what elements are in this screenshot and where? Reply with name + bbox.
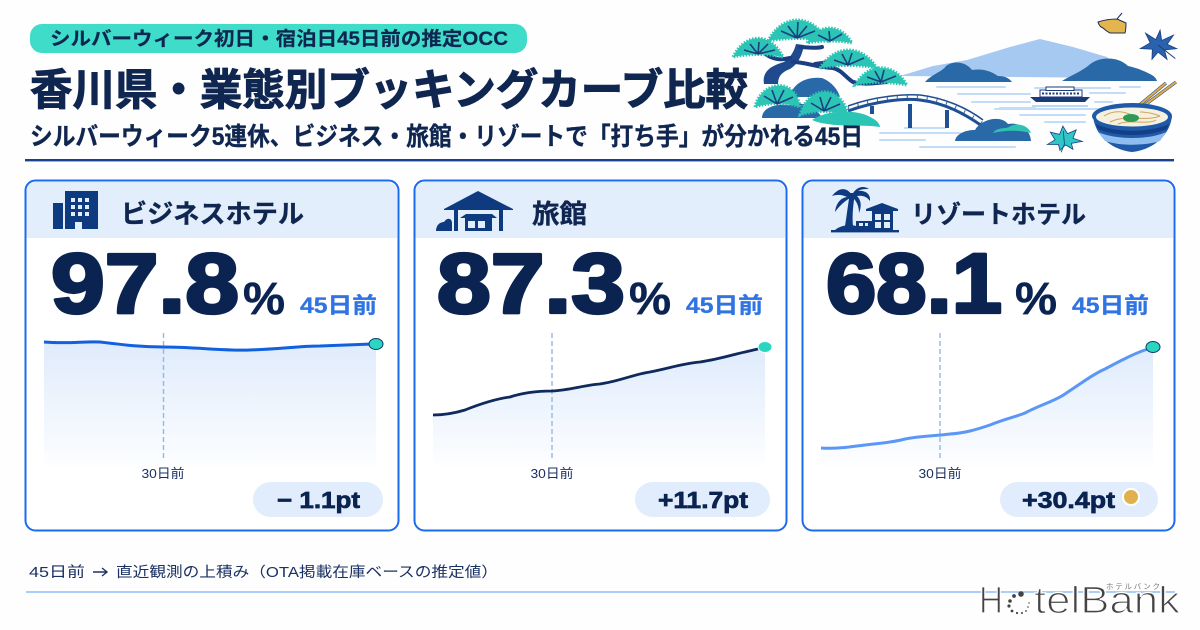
header tag pill <box>30 24 527 53</box>
panel: resort hotel <box>802 180 1174 530</box>
change badge <box>635 482 770 517</box>
udon bowl <box>1092 82 1176 152</box>
card header band <box>416 182 785 238</box>
dark bushes <box>790 78 840 97</box>
left island <box>925 63 1012 82</box>
icon: ryokan building <box>436 191 513 231</box>
footnote: 直近観測の上積み（OTA掲載在庫ベースの推定値） <box>116 564 498 581</box>
teal bush on small island <box>993 125 1031 133</box>
card frame <box>26 180 398 530</box>
trunk and branches <box>764 44 804 84</box>
occupancy value: 87.3 <box>437 236 625 330</box>
card heading: ビジネスホテル <box>121 199 304 229</box>
pine tree <box>733 20 907 127</box>
logo: HotelBank: H <box>979 580 1003 622</box>
logo: HotelBank: telBank <box>1034 580 1181 622</box>
change badge: +30.4pt <box>1022 487 1115 513</box>
ferry <box>1030 87 1090 106</box>
water ripples <box>880 87 1140 147</box>
card heading: 旅館 <box>532 199 587 229</box>
subtitle: シルバーウィーク5連休、ビジネス・旅館・リゾートで「打ち手」が分かれる45日 <box>30 122 863 151</box>
header tag pill: シルバーウィーク初日・宿泊日45日前の推定OCC <box>50 28 508 50</box>
percent sign: % <box>629 273 671 324</box>
line chart: 30日前 <box>142 466 184 481</box>
illustration: Kagawa scenery <box>733 13 1179 153</box>
arched bridge <box>848 95 983 128</box>
panel: business hotel <box>26 180 398 530</box>
occupancy value: 68.1 <box>826 236 1002 330</box>
header rule <box>25 159 1174 161</box>
change badge: − 1.1pt <box>277 487 360 513</box>
line chart <box>433 333 772 481</box>
small island <box>955 119 1031 141</box>
days label: 45日前 <box>686 293 763 318</box>
title: 香川県・業態別ブッキングカーブ比較 <box>30 67 748 115</box>
card header band <box>26 182 397 238</box>
card heading: リゾートホテル <box>911 201 1086 229</box>
maple leaf teal <box>1046 124 1083 153</box>
line chart <box>44 333 383 481</box>
logo: HotelBank: ホテルバンク <box>1106 582 1160 591</box>
footnote <box>29 564 498 581</box>
percent sign: % <box>243 273 285 324</box>
mountain <box>900 39 1125 78</box>
logo: HotelBank <box>979 580 1181 622</box>
days label: 45日前 <box>300 293 377 318</box>
icon: office building <box>53 191 98 229</box>
line chart <box>821 333 1160 481</box>
card header band <box>804 182 1173 238</box>
footnote: 45日前 <box>29 564 85 581</box>
occupancy value: 97.8 <box>51 236 239 330</box>
change badge <box>1000 482 1158 517</box>
right island <box>1062 58 1157 81</box>
days label: 45日前 <box>1072 293 1149 318</box>
maple leaf blue <box>1139 28 1179 62</box>
panel: ryokan <box>414 180 786 530</box>
icon: palm and resort house <box>831 187 899 232</box>
line chart: 30日前 <box>530 466 574 481</box>
line chart: 30日前 <box>918 466 962 481</box>
ginkgo leaf <box>1098 13 1126 33</box>
change badge: +11.7pt <box>658 487 748 513</box>
percent sign: % <box>1015 273 1057 324</box>
needles <box>744 22 896 111</box>
card frame <box>802 180 1174 530</box>
change badge <box>253 482 383 517</box>
teal lower foliage <box>755 86 800 107</box>
foliage pads <box>733 38 783 57</box>
card frame <box>414 180 786 530</box>
footer rule <box>26 591 1175 593</box>
